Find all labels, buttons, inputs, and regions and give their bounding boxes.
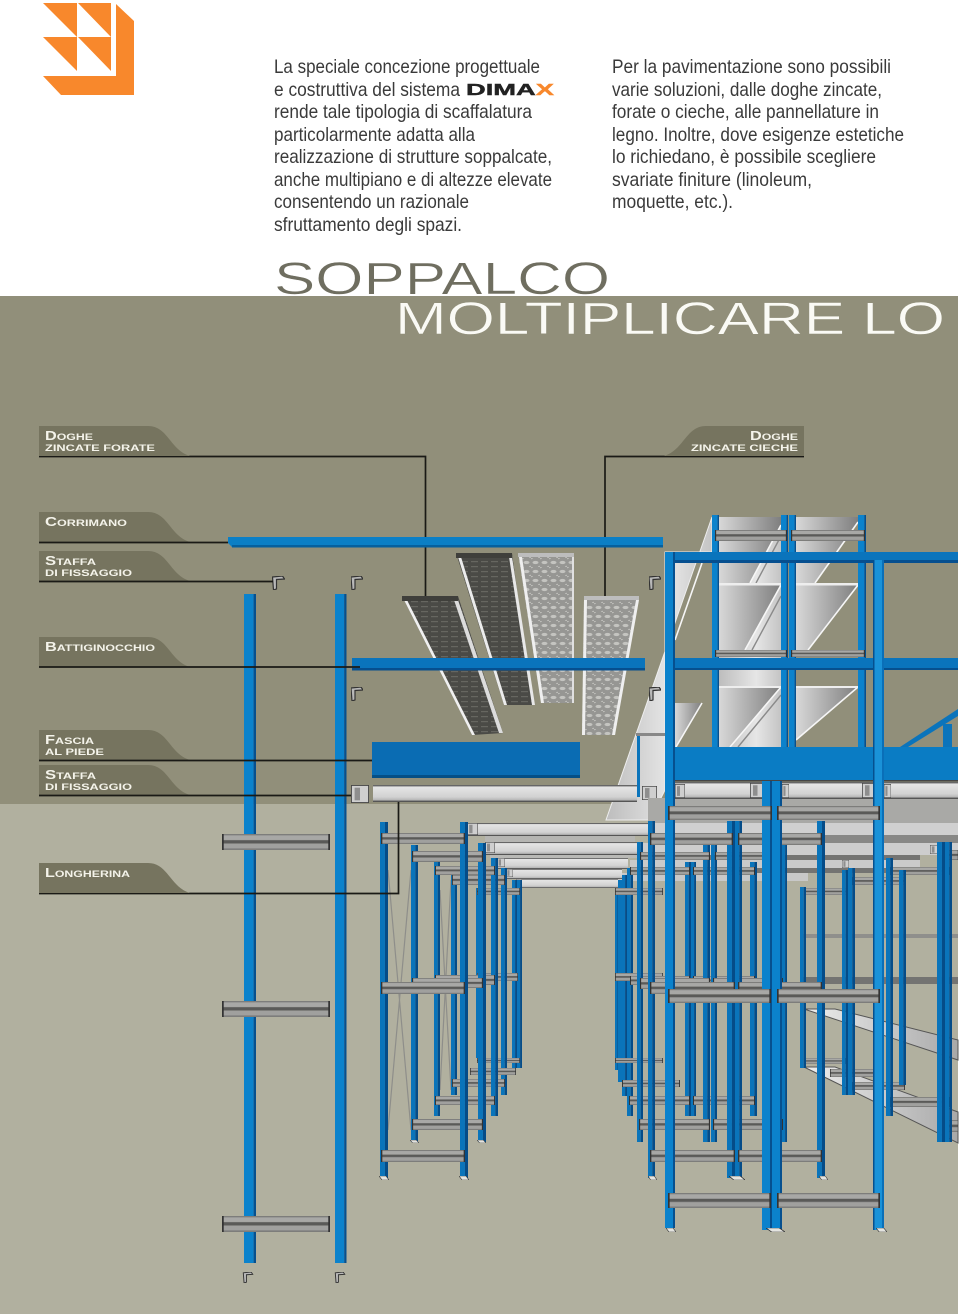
- text block: right intro: svariate finiture (linoleum,: [612, 169, 812, 191]
- label: doghe zincate forate: [39, 426, 190, 456]
- staffe di fissaggio: [243, 576, 661, 1283]
- leader lines for planks: [39, 456, 804, 596]
- text block: right intro: moquette, etc.).: [612, 191, 733, 213]
- left aisle beams: [467, 823, 648, 888]
- label: doghe zincate cieche: [664, 426, 804, 456]
- text block: left intro: [274, 56, 555, 236]
- loose uprights: [244, 594, 346, 1263]
- background: wall: [0, 296, 958, 804]
- doghe: light perforated planks: [518, 553, 639, 735]
- label: staffa di fissaggio lower: S TAFFA: [45, 768, 96, 782]
- label: battiginocchio: [39, 637, 360, 667]
- logo: [43, 3, 134, 95]
- slanted sheet under floor: [636, 733, 665, 800]
- title: MOLTIPLICARE LO: [395, 293, 945, 344]
- label: doghe zincate forate: ZINCATE FORATE: [45, 443, 155, 454]
- text block: left intro: DIMA X: [466, 82, 555, 99]
- underside of the mezzanine: [618, 798, 958, 881]
- text block: left intro: realizzazione di strutture soppalcate,: [274, 146, 552, 168]
- left shelving group: cross braces: [388, 870, 451, 1130]
- label: fascia al piede: [39, 730, 372, 760]
- label: battiginocchio: B ATTIGINOCCHIO: [45, 640, 155, 654]
- text block: right intro: legno. Inoltre, dove esigenze estetiche: [612, 124, 904, 146]
- text block: right intro: lo richiedano, è possibile scegliere: [612, 146, 876, 168]
- label: longherina: LONGHERINA: [45, 866, 130, 880]
- corrimano bar: [228, 537, 663, 548]
- label: fascia al piede: F ASCIA: [45, 733, 94, 747]
- battiginocchio bar: [352, 658, 645, 670]
- label: corrimano: C ORRIMANO: [45, 515, 127, 529]
- mezzanine frame: [665, 552, 958, 1232]
- right shelving group: rear uprights and rails: [615, 821, 952, 1180]
- label: doghe zincate forate: D OGHE: [45, 429, 93, 443]
- text block: left intro: consentendo un razionale: [274, 191, 469, 213]
- text block: left intro: rende tale tipologia di scaffalatura: [274, 101, 532, 123]
- fascia al piede: [372, 742, 580, 778]
- label: staffa di fissaggio lower: [39, 765, 351, 796]
- left shelving group: uprights and rails: [379, 822, 522, 1180]
- label: longherina: [39, 863, 190, 893]
- stair handrail: [900, 709, 958, 747]
- longherina leader line: [39, 802, 398, 894]
- label: corrimano: [39, 512, 228, 542]
- label: staffa di fissaggio: [39, 551, 273, 582]
- text block: left intro: particolarmente adatta alla: [274, 124, 475, 146]
- right shelving: slanted shelves: [803, 850, 958, 1143]
- label: staffa di fissaggio lower: DI FISSAGGIO: [45, 782, 132, 793]
- text block: left intro: e costruttiva del sistema: [274, 79, 460, 101]
- text block: right intro: varie soluzioni, dalle doghe zincate,: [612, 79, 882, 101]
- doghe: dark perforated planks: [402, 553, 535, 735]
- structure: upper shelving at the back: [606, 515, 866, 820]
- loose longherina beam: [351, 785, 637, 803]
- title: SOPPALCO: [274, 253, 610, 304]
- text block: left intro: anche multipiano e di altezze elevate: [274, 169, 552, 191]
- loose rails: [222, 834, 330, 1232]
- label: fascia al piede: AL PIEDE: [45, 747, 104, 758]
- label: staffa di fissaggio: DI FISSAGGIO: [45, 568, 132, 579]
- label: doghe zincate cieche: D OGHE: [750, 429, 798, 443]
- text block: right intro: Per la pavimentazione sono possibili: [612, 56, 891, 78]
- text block: left intro: La speciale concezione progettuale: [274, 56, 540, 78]
- title: [274, 253, 945, 344]
- text block: left intro: sfruttamento degli spazi.: [274, 214, 462, 236]
- text block: right intro: forate o cieche, alle pannellature in: [612, 101, 879, 123]
- label: doghe zincate cieche: ZINCATE CIECHE: [691, 443, 798, 454]
- background: floor: [0, 804, 958, 1314]
- label: staffa di fissaggio: S TAFFA: [45, 554, 96, 568]
- text block: right intro: [612, 56, 904, 213]
